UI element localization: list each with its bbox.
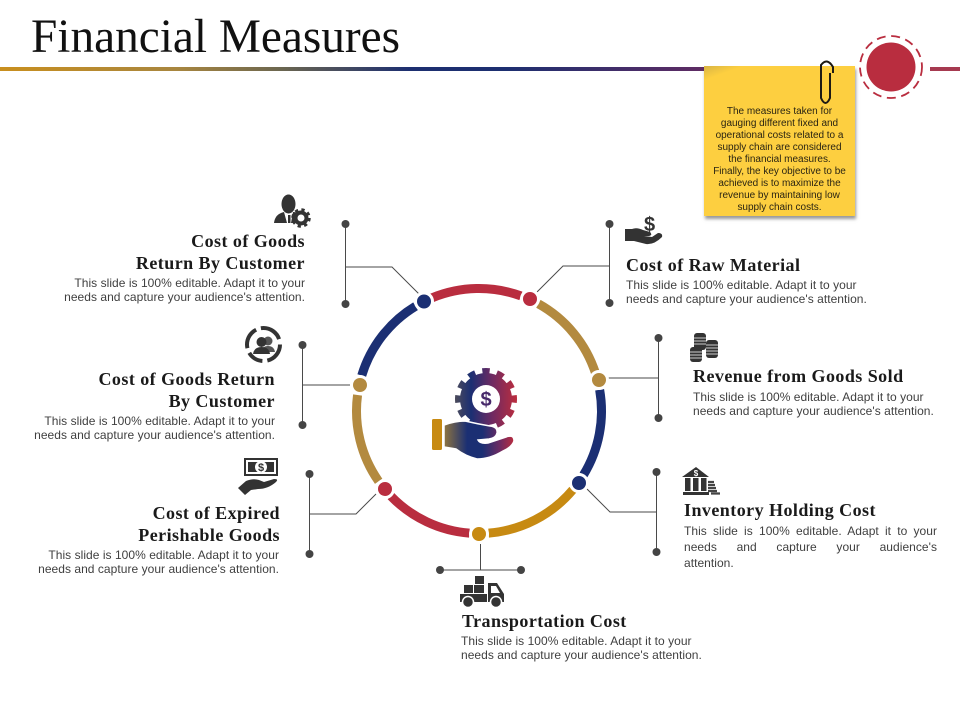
connector: goods return left bbox=[298, 341, 350, 429]
connector: raw material bbox=[537, 220, 614, 307]
icon: hand with banknote: $ bbox=[258, 462, 264, 474]
panel: cost of raw material bbox=[625, 214, 867, 306]
body text: attention. bbox=[684, 556, 734, 570]
sticky note text: supply chain costs. bbox=[737, 202, 822, 213]
connector: transportation bbox=[436, 544, 525, 574]
body text bbox=[461, 634, 702, 662]
sticky note text: Finally, the key objective to be bbox=[713, 166, 846, 177]
sticky note text: supply chain are considered bbox=[718, 142, 841, 153]
ring arcs bbox=[306, 238, 652, 584]
icon: person with gear bbox=[274, 194, 311, 228]
connector: revenue bbox=[608, 334, 662, 422]
body text bbox=[693, 390, 934, 418]
heading bbox=[138, 503, 280, 545]
icon: bank with coins: $ bbox=[694, 469, 699, 478]
heading bbox=[98, 369, 275, 411]
sticky note text: revenue by maintaining low bbox=[719, 190, 840, 201]
connector: inventory bbox=[587, 468, 660, 556]
body text: This slide is 100% editable. Adapt it to your bbox=[693, 390, 924, 404]
body text bbox=[684, 524, 937, 570]
icon: group in dashed circle bbox=[245, 326, 282, 363]
body text: needs and capture your audience's bbox=[684, 540, 937, 554]
icon: hand with dollar: $ bbox=[644, 214, 655, 236]
body text: This slide is 100% editable. Adapt it to your bbox=[48, 548, 279, 562]
icon: delivery truck bbox=[460, 576, 504, 607]
body text: needs and capture your audience's attention. bbox=[693, 404, 934, 418]
panel: transportation cost bbox=[460, 576, 702, 662]
icon: hand with banknote bbox=[238, 458, 278, 495]
icon: central gear and hand bbox=[432, 371, 514, 459]
heading: Cost of Goods Return bbox=[98, 369, 275, 389]
connector: goods return top left bbox=[342, 220, 420, 308]
heading: Cost of Expired bbox=[153, 503, 280, 523]
body text: This slide is 100% editable. Adapt it to your bbox=[44, 414, 275, 428]
body text: This slide is 100% editable. Adapt it to your bbox=[461, 634, 692, 648]
heading bbox=[136, 231, 305, 273]
body text: needs and capture your audience's attention. bbox=[38, 562, 279, 576]
sticky note text: the financial measures. bbox=[728, 154, 831, 165]
body text: This slide is 100% editable. Adapt it to your bbox=[626, 278, 857, 292]
sticky note bbox=[704, 66, 855, 216]
icon: coin stacks bbox=[690, 333, 718, 362]
heading: By Customer bbox=[169, 391, 275, 411]
panel: cost of goods return by customer (top left) bbox=[64, 194, 311, 304]
sticky note text: The measures taken for bbox=[727, 106, 832, 117]
panel: inventory holding cost bbox=[682, 467, 937, 570]
body text: needs and capture your audience's attention. bbox=[64, 290, 305, 304]
heading: Cost of Goods bbox=[191, 231, 305, 251]
sticky note text: achieved is to maximize the bbox=[718, 178, 841, 189]
body text: needs and capture your audience's attention. bbox=[461, 648, 702, 662]
title rule bbox=[0, 67, 704, 71]
body text bbox=[38, 548, 279, 576]
heading: Transportation Cost bbox=[462, 611, 627, 631]
body text bbox=[626, 278, 867, 306]
body text: needs and capture your audience's attention. bbox=[34, 428, 275, 442]
sticky note text: operational costs related to a bbox=[716, 130, 843, 141]
panel: cost of goods return by customer (left) bbox=[34, 326, 282, 442]
ring nodes bbox=[352, 290, 608, 542]
body text: needs and capture your audience's attention. bbox=[626, 292, 867, 306]
sticky note text: gauging different fixed and bbox=[721, 118, 838, 129]
heading: Perishable Goods bbox=[138, 525, 280, 545]
icon: central gear and hand: $ bbox=[480, 389, 492, 411]
icon: paper clip bbox=[820, 60, 834, 104]
body text bbox=[34, 414, 275, 442]
heading: Return By Customer bbox=[136, 253, 305, 273]
title: Financial Measures bbox=[31, 11, 400, 63]
title rule right end bbox=[930, 67, 960, 71]
body text: This slide is 100% editable. Adapt it to your bbox=[74, 276, 305, 290]
panel: cost of expired perishable goods bbox=[38, 458, 280, 576]
icon: hand with dollar bbox=[625, 214, 662, 244]
panel: revenue from goods sold bbox=[690, 333, 934, 418]
icon: bank with coins bbox=[682, 467, 720, 495]
body text: This slide is 100% editable. Adapt it to your bbox=[684, 524, 937, 538]
heading: Cost of Raw Material bbox=[626, 255, 800, 275]
heading: Inventory Holding Cost bbox=[684, 500, 876, 520]
badge: red circle bbox=[859, 35, 923, 99]
heading: Revenue from Goods Sold bbox=[693, 366, 904, 386]
sticky note text bbox=[713, 106, 846, 213]
body text bbox=[64, 276, 305, 304]
connector: expired goods bbox=[306, 470, 376, 558]
